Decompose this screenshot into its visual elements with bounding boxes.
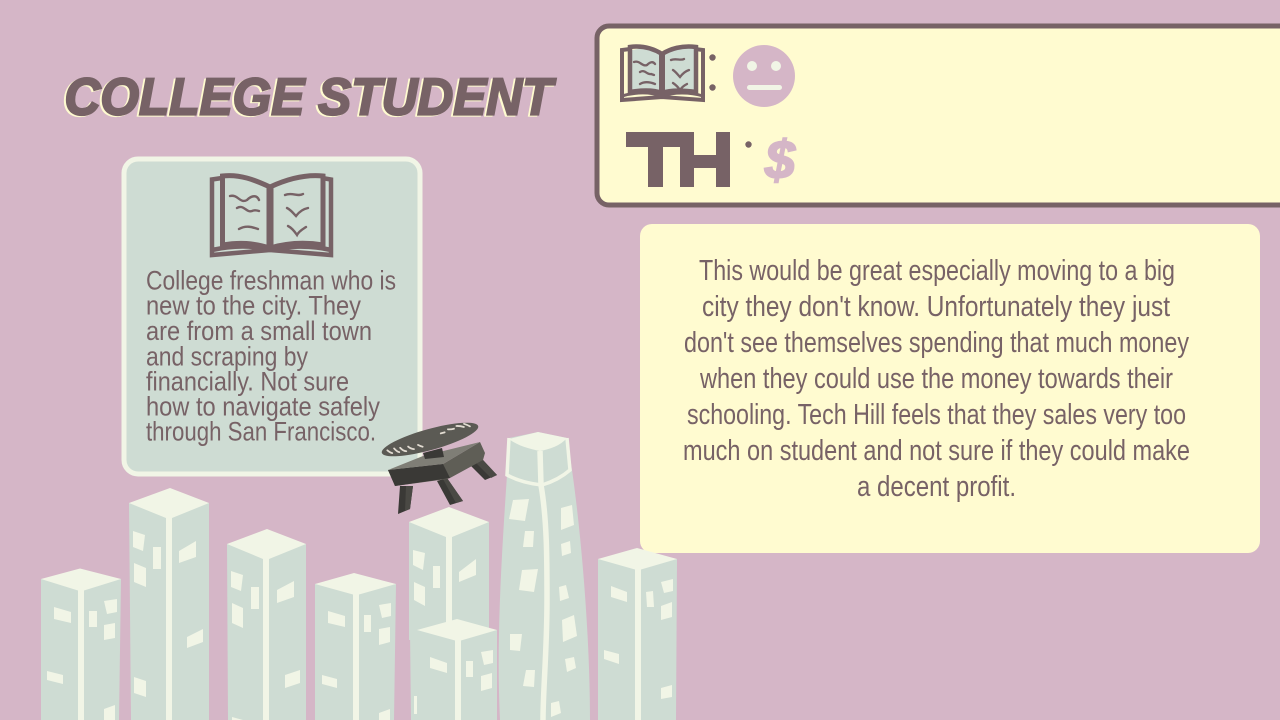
title: COLLEGE STUDENT [62,70,555,128]
persona text: financially. Not sure [146,366,349,396]
persona text: are from a small town [146,316,372,346]
quote text: city they don't know. Unfortunately they just [702,291,1170,323]
building 7: tapered tower [499,432,590,720]
building 3 [227,529,306,720]
building 2 [129,488,209,720]
building 6 [410,619,497,720]
quote text: a decent profit. [857,471,1016,503]
city skyline [41,432,677,720]
icon: dollar sign: $ [764,130,796,190]
quote text: This would be great especially moving to a big [699,255,1175,287]
persona text: and scraping by [146,342,308,372]
persona text [146,266,396,446]
icon: flying drone [379,416,497,514]
rotor [379,416,481,463]
legs [398,460,497,514]
persona text: new to the city. They [146,290,361,320]
panel: ratings [597,26,1280,205]
logo: TH [626,132,730,187]
building 4 [315,573,396,720]
icon: book rating [622,46,703,100]
title: COLLEGE STUDENT [64,68,557,126]
building 5 [409,507,489,640]
building 1 [41,568,121,720]
building 8 [598,548,677,720]
persona text: how to navigate safely [146,392,380,422]
icon: open book [212,176,331,255]
colon [709,54,716,91]
panel: quote [640,224,1260,553]
body [388,442,485,486]
quote text [683,255,1190,503]
icon: neutral face [733,45,795,107]
quote text: when they could use the money towards their [699,363,1173,395]
panel: persona description [124,159,420,474]
persona text: College freshman who is [146,266,396,296]
persona text: through San Francisco. [146,416,376,446]
colon dot [745,141,752,148]
